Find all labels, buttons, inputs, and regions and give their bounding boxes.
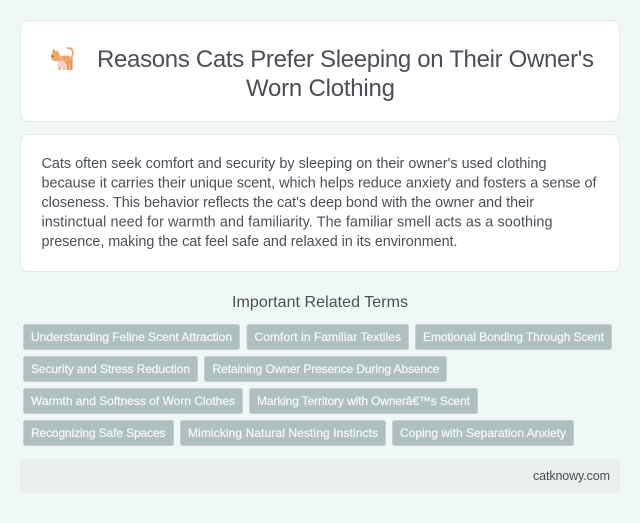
tag [392,420,574,446]
panel: description card [20,134,620,272]
tag: Security and Stress Reduction [31,362,190,376]
tag: Understanding Feline Scent Attraction [31,330,232,344]
tag: Recognizing Safe Spaces [31,426,166,440]
footer [20,459,620,493]
panel: title card [20,20,620,122]
text block: description: because it carries their unique scent, which helps reduce anxiety and fosters a sense of [42,176,598,192]
tag: Comfort in Familiar Textiles [254,330,401,344]
tag [24,324,240,350]
tag [204,356,446,382]
tag [180,420,386,446]
footer: catknowy.com [533,469,610,483]
tag [416,324,612,350]
panel: related term tags [24,324,612,446]
tag [24,388,242,414]
tag [250,388,478,414]
tag [24,420,174,446]
tag [24,356,198,382]
title: Worn Clothing [246,75,395,102]
text block: description [42,156,598,250]
tag: Warmth and Softness of Worn Clothes [31,394,235,408]
heading: related terms: Important Related Terms [232,294,408,311]
text block: description: instinctual need for warmth and familiarity. The familiar smell acts as a soothing [42,214,552,230]
text block: description: Cats often seek comfort and security by sleeping on their owner's used clothing [42,156,546,172]
text block: description: closeness. This behavior reflects the cat's deep bond with the owner and their [42,195,534,211]
tag: Retaining Owner Presence During Absence [212,362,440,376]
text block: description: presence, making the cat feel safe and relaxed in its environment. [42,234,458,250]
tag: Marking Territory with Ownerâ€™s Scent [257,394,471,408]
title [97,46,594,102]
tag: Emotional Bonding Through Scent [423,330,605,344]
tag [247,324,408,350]
tag: Mimicking Natural Nesting Instincts [188,426,378,440]
title: Reasons Cats Prefer Sleeping on Their Owner's [97,46,594,73]
tag: Coping with Separation Anxiety [400,426,566,440]
icon: cat [51,47,74,70]
